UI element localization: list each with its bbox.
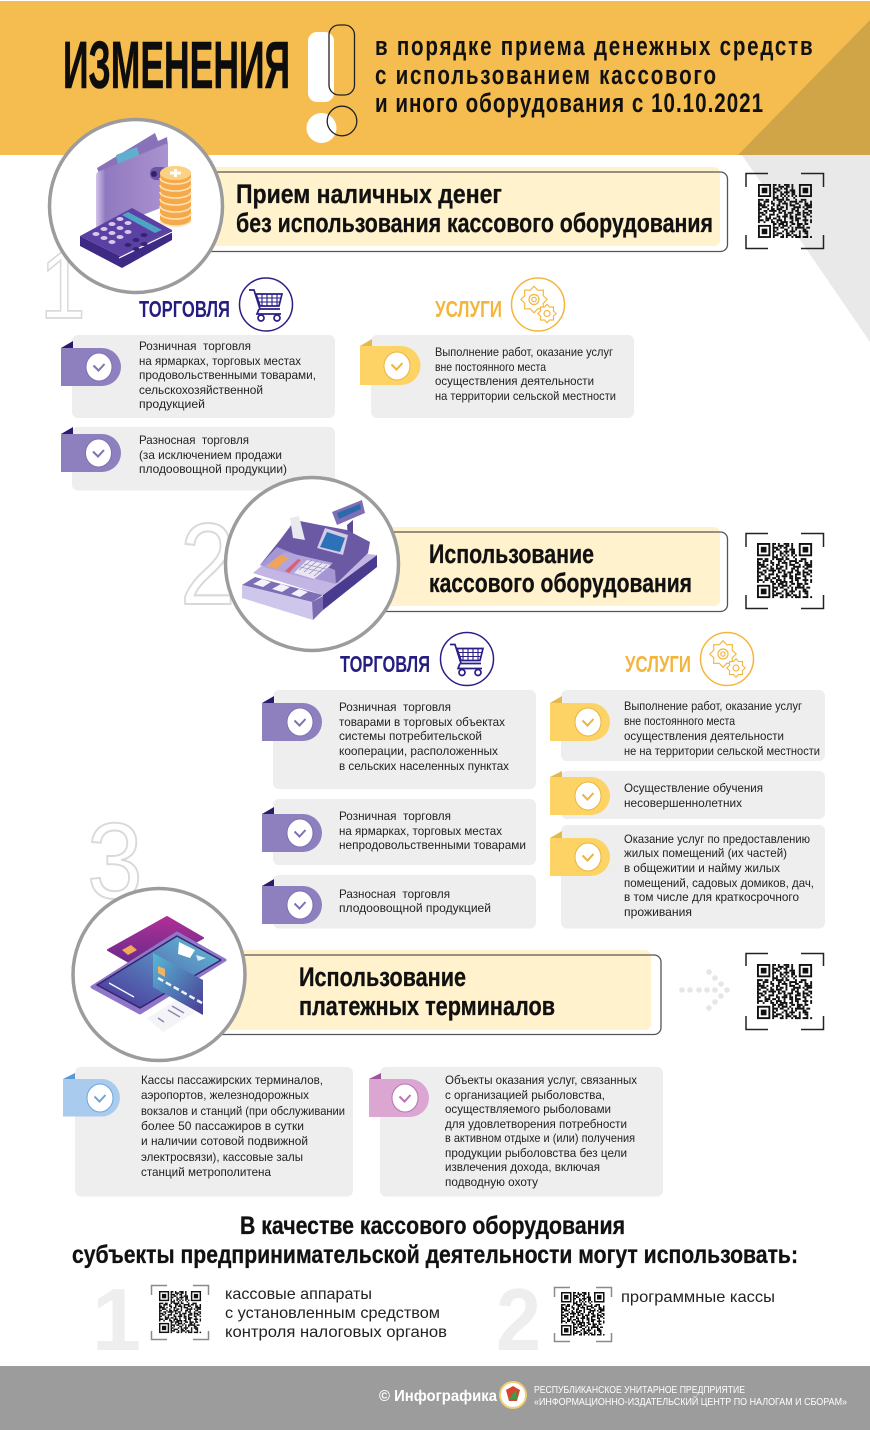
heading: trade 2: ТОРГОВЛЯ [340, 651, 430, 677]
card: retail non-food: на ярмарках, торговых местах [339, 824, 502, 838]
badge: check [61, 427, 121, 472]
icon: shopping cart [440, 632, 494, 686]
card: services outside permanent place [360, 335, 634, 418]
card: fishing services: для удовлетворения потребности [445, 1117, 627, 1131]
icon: QR code small 1 [152, 1286, 208, 1340]
heading: services 2 [625, 632, 754, 686]
number 3 outline: 3 [87, 801, 143, 922]
badge: check [550, 771, 610, 815]
panel: section 1 heading box: Прием наличных денег [236, 179, 502, 209]
icon: calculator [80, 208, 172, 268]
header band [0, 1, 870, 155]
card: retail non-food: Розничная торговля [339, 809, 451, 823]
panel: section 2 heading box: кассового оборудования [429, 568, 692, 598]
card: passenger terminals [63, 1067, 353, 1196]
card: passenger terminals: Кассы пассажирских терминалов, [141, 1073, 323, 1087]
panel: section 3 heading box: Использование [299, 962, 466, 992]
panel: section 1 heading box [190, 167, 728, 252]
card: education of minors: несовершеннолетних [624, 796, 742, 810]
card: retail at fairs: Розничная торговля [139, 339, 251, 353]
icon: QR code 1 [746, 174, 824, 248]
circle: cash register illustration [226, 478, 398, 650]
item 1: cash registers: с установленным средством [225, 1305, 440, 1322]
card: fishing services [369, 1067, 663, 1196]
item 2: software registers: программные кассы [621, 1289, 775, 1306]
card: passenger terminals: и наличии сотовой подвижной [141, 1134, 308, 1148]
subtitle: в порядке приема денежных средств [375, 31, 813, 62]
icon: gears [700, 632, 754, 686]
circle: payment terminal illustration [73, 888, 245, 1060]
card: housing services: помещений, садовых домиков, дач, [624, 876, 814, 890]
badge: check [369, 1073, 429, 1117]
icon: bank card purple [108, 917, 203, 970]
icon: smartphone [92, 933, 225, 1013]
card: retail in consumer cooperation: системы потребительской [339, 729, 482, 743]
card: housing services: проживания [624, 905, 692, 919]
icon: coin stack [160, 166, 191, 226]
display pole [347, 520, 353, 537]
item 2: software registers: 2 [496, 1270, 541, 1369]
item 2: software registers [496, 1270, 775, 1369]
card: housing services: в том числе для краткосрочного [624, 890, 799, 904]
subtitle [375, 31, 813, 119]
icon: shopping cart [240, 278, 292, 331]
card: services not in rural area [550, 690, 825, 761]
badge: check [360, 339, 420, 385]
card: services not in rural area: Выполнение работ, оказание услуг [624, 699, 803, 713]
heading: trade 1 [139, 278, 292, 331]
badge: check [63, 1073, 120, 1116]
panel: section 3 heading box [210, 950, 661, 1034]
card: passenger terminals: вокзалов и станций (при обслуживании [141, 1104, 345, 1118]
card: passenger terminals: аэропортов, железнодорожных [141, 1088, 309, 1102]
card: retail at fairs: на ярмарках, торговых местах [139, 354, 301, 368]
card: services not in rural area: не на территории сельской местности [624, 744, 820, 758]
footer: copyright: © Инфографика [379, 1388, 497, 1405]
card: retail at fairs: продовольственными товарами, [139, 368, 316, 382]
arrow: dotted [679, 969, 730, 1011]
card: fishing services: подводную охоту [445, 1175, 538, 1189]
card: fishing services: осуществляемого рыболовами [445, 1102, 611, 1116]
heading: cash equipment: В качестве кассового оборудования [240, 1212, 625, 1240]
icon: gears [512, 278, 564, 331]
badge: check [550, 696, 610, 741]
card: housing services [550, 825, 825, 928]
heading: services 1: УСЛУГИ [435, 296, 502, 322]
card: passenger terminals: электросвязи), кассовые залы [141, 1150, 303, 1164]
circle: wallet illustration [50, 120, 222, 292]
heading: trade 1: ТОРГОВЛЯ [139, 296, 230, 322]
card: retail non-food [262, 799, 536, 865]
card: passenger terminals: более 50 пассажиров в сутки [141, 1119, 304, 1133]
card: fishing services: Объекты оказания услуг, связанных [445, 1073, 637, 1087]
heading: services 2: УСЛУГИ [625, 651, 691, 677]
heading: services 1 [435, 278, 564, 331]
card: education of minors [550, 771, 825, 819]
card: fishing services: продукции рыболовства без цели [445, 1146, 627, 1160]
title: ИЗМЕНЕНИЯ [63, 28, 290, 103]
card: services not in rural area: осуществления деятельности [624, 729, 784, 743]
card: housing services: жилых помещений (их частей) [624, 846, 787, 860]
card: education of minors: Осуществление обучения [624, 781, 763, 795]
card: retail in consumer cooperation: кооперации, расположенных [339, 744, 498, 758]
card: fishing services: извлечения дохода, включая [445, 1160, 600, 1174]
card: retail in consumer cooperation: Розничная торговля [339, 700, 451, 714]
card: services not in rural area: вне постоянного места [624, 714, 735, 728]
icon: bank card blue [153, 953, 203, 1015]
card: housing services: Оказание услуг по предоставлению [624, 832, 810, 846]
card: services outside permanent place: на территории сельской местности [435, 389, 616, 403]
background: grey triangle [742, 155, 870, 342]
panel: section 1 heading box: без использования кассового оборудования [236, 208, 713, 238]
icon: wallet [96, 133, 168, 232]
item 1: cash registers: кассовые аппараты [225, 1286, 372, 1303]
card: retail in consumer cooperation: товарами в торговых объектах [339, 715, 505, 729]
footer: organisation name: РЕСПУБЛИКАНСКОЕ УНИТАРНОЕ ПРЕДПРИЯТИЕ [534, 1384, 745, 1396]
card: peddling: плодоовощной продукции) [139, 462, 287, 476]
card: peddling [61, 427, 335, 490]
subtitle: и иного оборудования с 10.10.2021 [375, 88, 763, 119]
badge: check [262, 879, 322, 924]
card: housing services: в общежитии и найму жилых [624, 861, 780, 875]
item 1: cash registers [92, 1270, 447, 1369]
card: peddling vegetables: плодоовощной продукцией [339, 901, 491, 915]
card: peddling vegetables [262, 875, 536, 928]
card: services outside permanent place: Выполнение работ, оказание услуг [435, 345, 614, 359]
card: fishing services: с организацией рыболовства, [445, 1088, 605, 1102]
card: peddling: Разносная торговля [139, 433, 249, 447]
card: peddling: (за исключением продажи [139, 448, 282, 462]
card: retail at fairs: продукцией [139, 397, 205, 411]
card: retail non-food: непродовольственными товарами [339, 838, 526, 852]
item 1: cash registers: 1 [92, 1270, 141, 1369]
card: fishing services: в активном отдыхе и (или) получения [445, 1131, 635, 1145]
panel: section 2 heading box [370, 527, 728, 612]
subtitle: с использованием кассового [375, 60, 716, 91]
number 1 outline: 1 [40, 231, 86, 338]
icon: cash register [242, 500, 377, 620]
footer [0, 1366, 870, 1430]
item 1: cash registers: контроля налоговых органов [225, 1324, 447, 1341]
heading: trade 2 [340, 632, 494, 686]
card: passenger terminals: станций метрополитена [141, 1165, 271, 1179]
icon: QR code 2 [746, 534, 824, 608]
icon: QR code 3 [746, 954, 824, 1030]
icon: exclamation mark [306, 25, 357, 143]
card: services outside permanent place: осуществления деятельности [435, 374, 594, 388]
card: services outside permanent place: вне постоянного места [435, 360, 546, 374]
badge: check [262, 807, 322, 852]
icon: logo emblem [500, 1382, 526, 1408]
heading: cash equipment [72, 1212, 798, 1269]
badge: check [262, 696, 322, 741]
badge: check [61, 341, 121, 386]
panel: section 2 heading box: Использование [429, 539, 594, 569]
card: retail in consumer cooperation [262, 690, 536, 789]
badge: check [550, 831, 610, 876]
icon: receipt [147, 1000, 195, 1032]
card: peddling vegetables: Разносная торговля [339, 887, 450, 901]
card: retail at fairs: сельскохозяйственной [139, 383, 263, 397]
card: retail in consumer cooperation: в сельских населенных пунктах [339, 759, 509, 773]
panel: section 3 heading box: платежных терминалов [299, 991, 555, 1021]
card: retail at fairs [61, 335, 335, 418]
number 2 outline: 2 [180, 499, 236, 629]
icon: QR code small 2 [554, 1288, 612, 1342]
